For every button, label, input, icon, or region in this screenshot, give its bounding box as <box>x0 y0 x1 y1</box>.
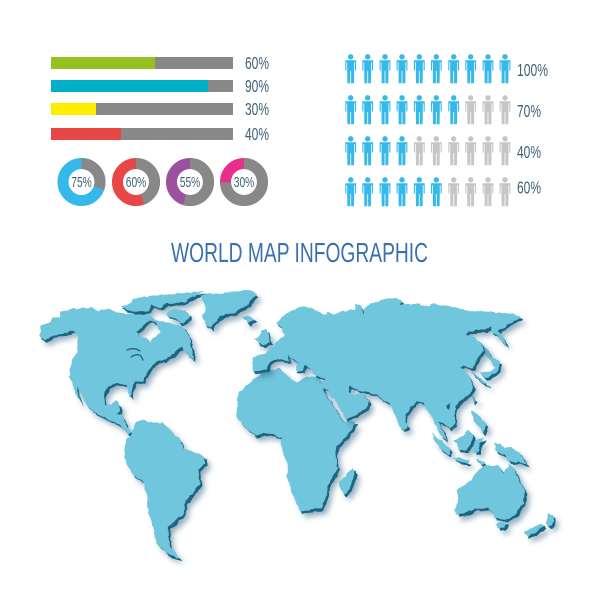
pictogram row: 60% <box>345 177 541 206</box>
pictogram row: 60%: 60% <box>517 178 541 198</box>
bar: red 40% <box>51 124 269 144</box>
panel: donut charts <box>63 164 262 200</box>
donut: 60% <box>118 164 154 200</box>
donut: 55%: 55% <box>180 174 200 191</box>
bar: teal 90%: 90% <box>245 76 269 96</box>
pictogram row: 40% <box>345 136 541 165</box>
bar: yellow 30% <box>51 99 269 119</box>
bar: yellow 30%: 30% <box>245 99 269 119</box>
donut: 60%: 60% <box>126 174 146 191</box>
bar: red 40%: 40% <box>245 124 269 144</box>
map: Eurasia <box>252 298 526 446</box>
bar: teal 90% <box>51 76 269 96</box>
donut: 30% <box>226 164 262 200</box>
donut: 30%: 30% <box>234 174 254 191</box>
bar: green 60% <box>51 53 269 73</box>
donut: 75% <box>63 164 100 200</box>
donut: 55% <box>172 164 208 200</box>
world map <box>39 289 558 564</box>
title: WORLD MAP INFOGRAPHIC <box>171 237 428 268</box>
pictogram row: 100% <box>345 54 548 83</box>
pictogram row: 70%: 70% <box>517 101 541 121</box>
pictogram row: 100%: 100% <box>517 60 548 80</box>
pictogram row: 40%: 40% <box>517 142 541 162</box>
map: Americas, Africa, Oceania and islands <box>39 289 558 564</box>
panel: progress bars <box>51 53 269 144</box>
bar: green 60%: 60% <box>245 53 269 73</box>
map: Great Lakes <box>127 349 143 360</box>
pictogram row: 70% <box>345 95 541 124</box>
panel: people pictograms <box>345 54 548 206</box>
donut: 75%: 75% <box>71 174 92 191</box>
